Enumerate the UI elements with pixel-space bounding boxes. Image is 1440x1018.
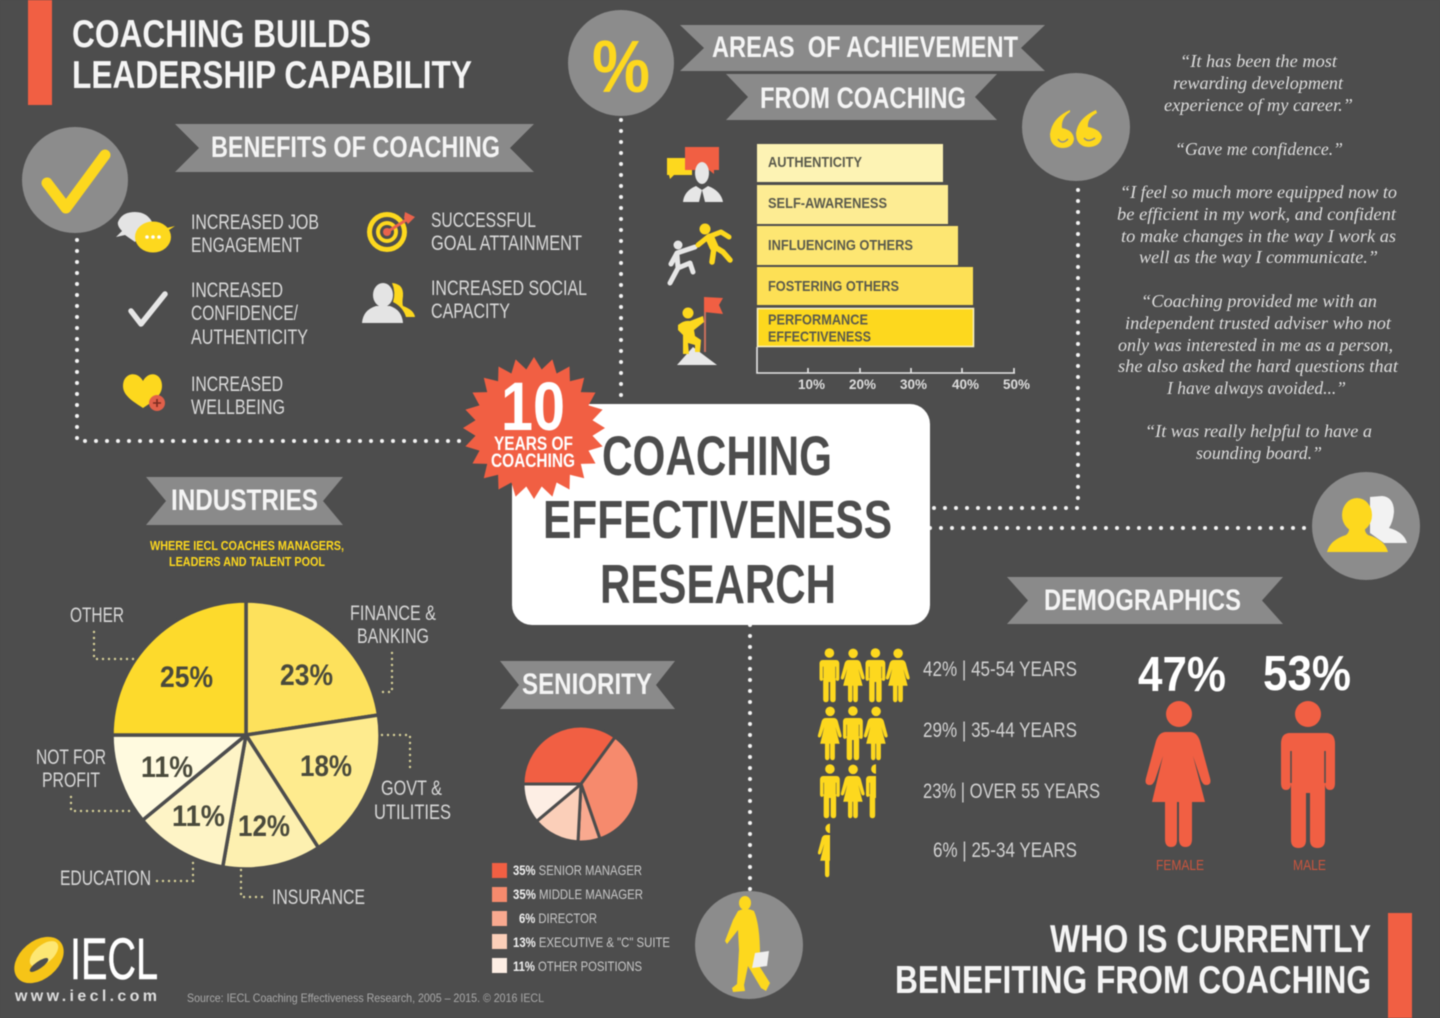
text block: participant quotes: be efficient in my work, and confident: [1117, 204, 1397, 224]
figure: female 47%: FEMALE: [1156, 857, 1204, 874]
age labels: 29% | 35-44 YEARS: [923, 719, 1077, 742]
legend: seniority: 35% SENIOR MANAGER: [513, 862, 642, 878]
text block: participant quotes: she also asked the hard questions that: [1118, 356, 1399, 376]
legend: seniority: 13% EXECUTIVE & "C" SUITE: [513, 934, 670, 950]
pie labels: [36, 602, 451, 909]
pictogram: over 55 years: [820, 764, 886, 818]
benefit: increased job engagement: [116, 211, 319, 257]
legend: seniority: [492, 862, 670, 974]
panel: central title card: EFFECTIVENESS: [543, 490, 892, 550]
panel: seniority: [492, 661, 675, 974]
pie labels: OTHER: [70, 604, 124, 627]
benefit: increased confidence: [131, 279, 308, 349]
pie labels: INSURANCE: [272, 886, 365, 909]
heading: benefits of coaching ribbon: BENEFITS OF COACHING: [211, 131, 500, 164]
pie values: 11%: [172, 800, 225, 833]
heading: benefits of coaching ribbon: [175, 124, 534, 172]
logo: IECL: www.iecl.com: [14, 988, 157, 1005]
chart axis with ticks: 30%: [900, 376, 928, 392]
text block: participant quotes: sounding board.”: [1196, 443, 1322, 463]
legend: seniority: 6% DIRECTOR: [519, 910, 597, 926]
figure: female 47%: 47%: [1138, 648, 1226, 702]
benefit: successful goal attainment: SUCCESSFUL: [431, 209, 536, 232]
title: who is currently benefiting: WHO IS CURRENTLY: [1050, 918, 1371, 961]
pictogram: 25-34 years: [817, 823, 831, 878]
text block: participant quotes: rewarding development: [1173, 73, 1344, 93]
bar: self-awareness: [757, 185, 948, 224]
figure: male 53%: MALE: [1293, 857, 1326, 874]
icon: people badge: [1312, 472, 1420, 580]
icon: percent badge: [568, 10, 674, 116]
benefit: increased social capacity: INCREASED SOCIAL: [431, 277, 587, 300]
heading: demographics ribbon: [1007, 577, 1283, 624]
accent bar: bottom right: [1388, 913, 1412, 1018]
panel: benefits of coaching: [116, 124, 587, 419]
legend: seniority: 35% MIDDLE MANAGER: [513, 886, 643, 902]
text block: participant quotes: independent trusted adviser who not: [1125, 313, 1392, 333]
icon: percent badge: %: [592, 25, 650, 108]
legend: seniority: 11% OTHER POSITIONS: [513, 958, 642, 974]
heading: areas of achievement ribbons: FROM COACHING: [760, 82, 966, 115]
bar: influencing others: [757, 226, 958, 265]
pie chart: industries: [112, 601, 380, 869]
bar: authenticity: AUTHENTICITY: [768, 154, 862, 171]
pie values: [141, 659, 352, 843]
text block: participant quotes: [1117, 51, 1399, 463]
figure: male 53%: [1263, 647, 1351, 874]
chart axis with ticks: 10%: [798, 376, 826, 392]
benefit: increased job engagement: ENGAGEMENT: [191, 234, 302, 257]
badge: 10 years of coaching: YEARS OF: [494, 434, 573, 455]
title: who is currently benefiting: [895, 918, 1371, 1002]
heading: demographics ribbon: DEMOGRAPHICS: [1044, 584, 1241, 617]
panel: demographics: [818, 577, 1351, 877]
panel: industries: [36, 477, 451, 909]
text block: participant quotes: to make changes in the way I work as: [1121, 226, 1396, 246]
subheading: where IECL coaches: [150, 538, 344, 569]
benefit: increased confidence: AUTHENTICITY: [191, 326, 308, 349]
pie labels: GOVT &: [381, 777, 442, 800]
benefit: increased wellbeing: WELLBEING: [191, 396, 285, 419]
text block: participant quotes: only was interested in me as a person,: [1118, 335, 1393, 355]
pie values: 25%: [160, 661, 213, 694]
pie labels: FINANCE &: [350, 602, 436, 625]
benefit: increased social capacity: [362, 277, 587, 323]
text block: participant quotes: “Coaching provided me with an: [1141, 291, 1377, 311]
title: coaching builds leadership capability: LEADERSHIP CAPABILITY: [72, 54, 472, 97]
heading: industries ribbon: [146, 477, 343, 525]
chart axis with ticks: 50%: [1003, 376, 1031, 392]
panel: areas of achievement chart icons: [667, 147, 730, 365]
figure: female 47%: [1138, 648, 1226, 874]
bar: influencing others: INFLUENCING OTHERS: [768, 237, 913, 254]
heading: areas of achievement ribbons: AREAS OF ACHIEVEMENT: [712, 31, 1018, 64]
subheading: where IECL coaches: WHERE IECL COACHES MANAGERS,: [150, 538, 344, 553]
text block: participant quotes: experience of my career.”: [1164, 95, 1353, 115]
chart axis with ticks: [757, 347, 1031, 392]
icon: quotation badge: [1022, 73, 1130, 181]
icon: speaker with speech bubbles: [667, 147, 723, 202]
pie labels: NOT FOR: [36, 746, 106, 769]
panel: central title card: [512, 404, 930, 625]
chart axis with ticks: 40%: [952, 376, 980, 392]
heading: seniority ribbon: SENIORITY: [522, 668, 652, 701]
icon: climber with flag on summit: [677, 297, 723, 365]
panel: central title card: RESEARCH: [600, 553, 836, 615]
bar: fostering others: FOSTERING OTHERS: [768, 278, 899, 295]
icon: climbers helping each other: [670, 224, 730, 283]
benefit: increased wellbeing: INCREASED: [191, 373, 283, 396]
source note: Source: IECL Coaching Effectiveness Research, 2005 – 2015. © 2016 IECL: [187, 991, 544, 1005]
logo: IECL: [5, 927, 158, 1005]
badge: 10 years of coaching: COACHING: [491, 451, 575, 472]
pie labels: EDUCATION: [60, 867, 151, 890]
text block: participant quotes: well as the way I communicate.”: [1139, 247, 1378, 267]
panel: central title card: COACHING: [602, 424, 832, 487]
logo: IECL: IECL: [70, 927, 158, 992]
age labels: 6% | 25-34 YEARS: [933, 839, 1077, 862]
title: coaching builds leadership capability: [72, 13, 472, 97]
badge: 10 years of coaching: [463, 357, 605, 499]
benefit: successful goal attainment: [367, 209, 582, 255]
bar: self-awareness: SELF-AWARENESS: [768, 195, 887, 212]
benefit: successful goal attainment: GOAL ATTAINMENT: [431, 232, 582, 255]
pie labels: PROFIT: [42, 769, 100, 792]
bar chart: areas of achievement: [757, 144, 1031, 392]
benefit: increased confidence: INCREASED: [191, 279, 283, 302]
bar: performance effectiveness: EFFECTIVENESS: [768, 328, 871, 346]
bar: performance effectiveness: PERFORMANCE: [768, 312, 868, 328]
pie values: 18%: [300, 750, 352, 783]
pie values: 23%: [280, 659, 333, 692]
text block: participant quotes: “I feel so much more equipped now to: [1120, 182, 1397, 202]
bar: performance effectiveness: [758, 308, 974, 346]
figure: male 53%: 53%: [1263, 647, 1351, 701]
age labels: 23% | OVER 55 YEARS: [923, 780, 1100, 803]
bar: fostering others: [757, 267, 973, 305]
text block: participant quotes: “It was really helpful to have a: [1145, 421, 1372, 441]
badge: 10 years of coaching: 10: [501, 368, 565, 445]
heading: industries ribbon: INDUSTRIES: [171, 484, 318, 517]
age labels: 42% | 45-54 YEARS: [923, 658, 1077, 681]
benefit: increased social capacity: CAPACITY: [431, 300, 510, 323]
pie values: 12%: [238, 810, 290, 843]
accent bar: top left: [28, 0, 52, 105]
icon: checkmark badge: [22, 127, 128, 233]
pie labels: BANKING: [357, 625, 429, 648]
benefit: increased confidence: CONFIDENCE/: [191, 302, 298, 325]
age labels: [923, 658, 1100, 862]
pie chart: seniority: [523, 726, 639, 842]
text block: participant quotes: “It has been the most: [1180, 51, 1338, 71]
pictogram: 35-44 years: [818, 706, 888, 760]
pie labels: UTILITIES: [374, 801, 451, 824]
title: coaching builds leadership capability: COACHING BUILDS: [72, 13, 371, 56]
heading: areas of achievement ribbons: [680, 25, 1045, 120]
icon: walking businessman badge: [695, 891, 803, 999]
benefit: increased job engagement: INCREASED JOB: [191, 211, 319, 234]
heading: seniority ribbon: [500, 661, 675, 709]
bar: authenticity: [757, 144, 943, 182]
text block: participant quotes: “Gave me confidence.”: [1175, 139, 1343, 159]
benefit: increased wellbeing: [123, 373, 285, 419]
subheading: where IECL coaches: LEADERS AND TALENT POOL: [169, 554, 325, 569]
pictogram: 45-54 years: [820, 648, 910, 702]
text block: participant quotes: I have always avoided...”: [1166, 378, 1346, 398]
chart axis with ticks: 20%: [849, 376, 877, 392]
pie values: 11%: [141, 751, 193, 784]
